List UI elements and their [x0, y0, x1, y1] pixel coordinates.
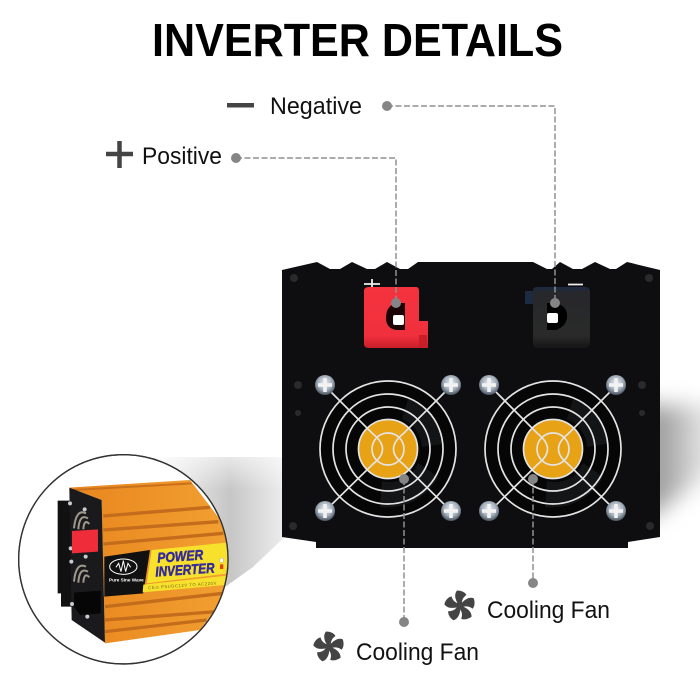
right cooling fan — [485, 381, 621, 517]
leader line — [403, 479, 405, 622]
negative dots — [382, 101, 560, 308]
black end face — [69, 488, 105, 643]
mounting flange — [58, 500, 72, 607]
small fans — [74, 512, 89, 529]
yellow label — [147, 542, 230, 583]
icon: fan — [313, 632, 346, 663]
panel polarity marks — [364, 279, 583, 289]
panel mounting bolts — [289, 274, 654, 530]
callout: positive — [106, 141, 401, 308]
inset: product photo: INVERTER — [155, 560, 215, 580]
icon: plus — [106, 141, 133, 168]
negative leader line — [387, 106, 555, 303]
callout: cooling fan right — [444, 474, 610, 624]
face screws — [68, 501, 89, 619]
left cooling fan — [320, 381, 456, 517]
black terminal — [74, 591, 101, 615]
positive leader line — [236, 158, 396, 303]
inset: product photo: POWER — [157, 546, 204, 566]
dots — [528, 474, 538, 588]
inset: product photo: Pure Sine Wave — [109, 578, 144, 583]
red terminal — [72, 529, 98, 553]
title: INVERTER DETAILS — [152, 14, 563, 66]
panel: inverter rear face — [282, 262, 660, 548]
inset: product photo — [19, 455, 243, 664]
leader line — [532, 479, 534, 583]
red positive terminal — [364, 287, 428, 348]
icon: fan — [444, 590, 477, 622]
callout: cooling fan left — [313, 474, 479, 666]
positive label: Positive — [142, 143, 222, 170]
right panel shadow — [660, 392, 700, 527]
black label — [104, 550, 150, 597]
label: Cooling Fan — [487, 597, 610, 624]
fan screws — [315, 375, 626, 521]
positive dots — [231, 153, 401, 308]
icon: minus — [227, 103, 254, 108]
negative label: Negative — [270, 93, 362, 120]
callout: negative — [227, 93, 560, 308]
label: Cooling Fan — [356, 639, 479, 666]
inset: product photo: CE⊙ PSI/DC12V TO AC220V — [148, 581, 217, 590]
projection beam from inset to panel — [150, 456, 290, 587]
dots — [399, 474, 409, 627]
panel body — [282, 262, 660, 548]
black negative terminal — [525, 287, 590, 348]
orange casing — [69, 480, 243, 643]
